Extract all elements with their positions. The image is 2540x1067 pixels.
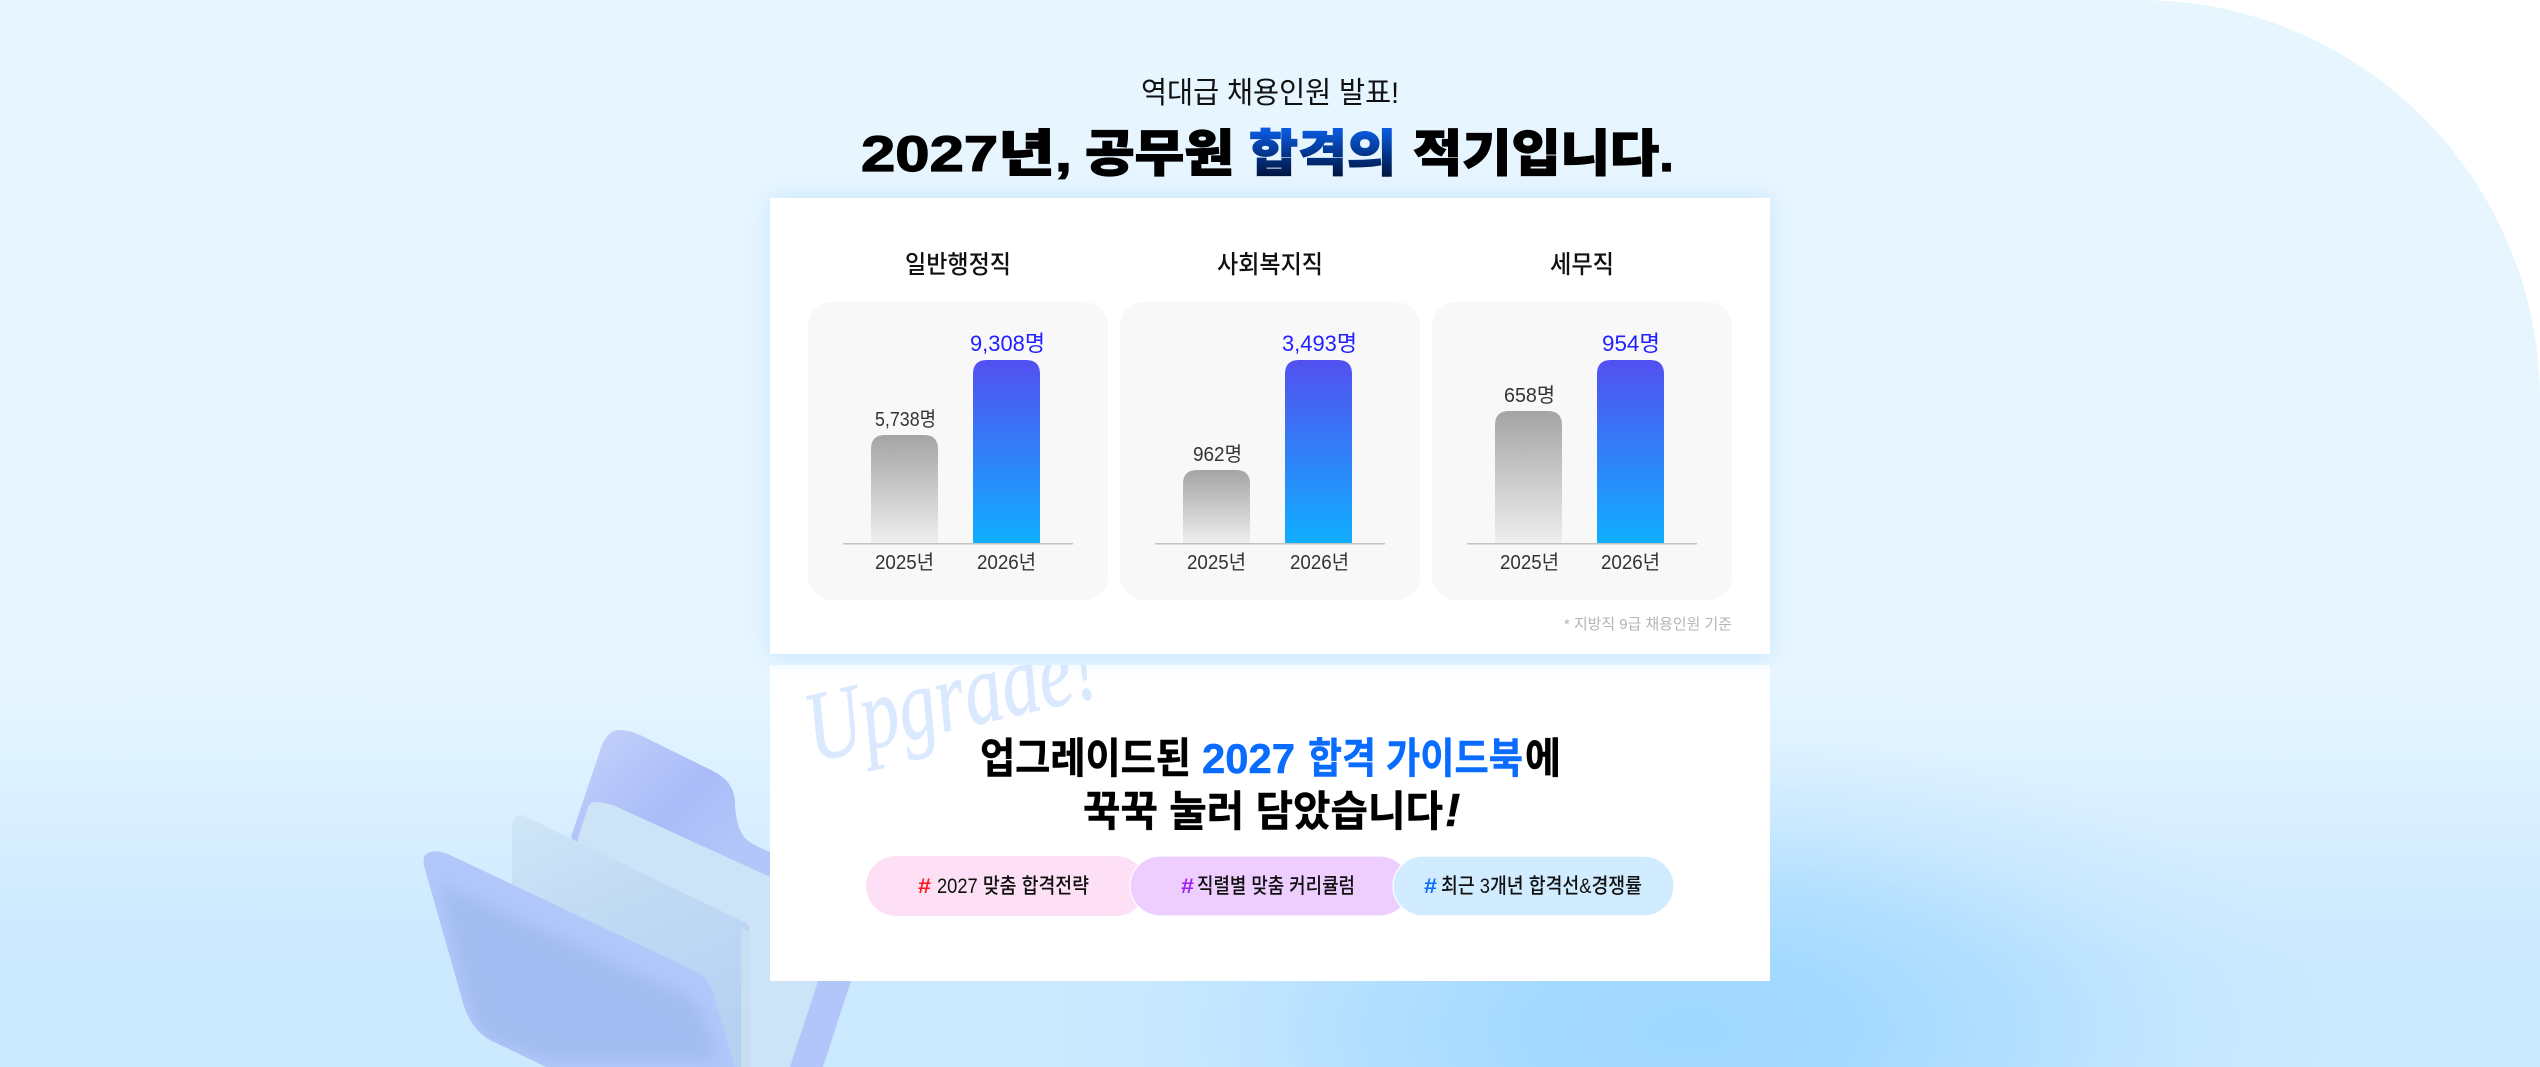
panel shadow xyxy=(770,198,1770,656)
axis labels: 2026년 xyxy=(1601,551,1660,574)
tag: 2027 맞춤 합격전략 xyxy=(866,856,1146,916)
subtitle: 역대급 채용인원 발표! xyxy=(1141,77,1399,110)
title: 2027년, xyxy=(861,126,1072,182)
column: 일반행정직 xyxy=(808,251,1108,600)
title xyxy=(861,126,1674,182)
icon: folder illustration xyxy=(424,730,880,1067)
card xyxy=(1432,302,1732,600)
tag: 2027 맞춤 합격전략: 2027 맞춤 합격전략 xyxy=(937,875,1089,898)
axis labels: 2026년 xyxy=(1290,551,1349,574)
heading: 사회복지직 xyxy=(1217,251,1323,279)
tag: 최근 3개년 합격선&경쟁률: 최근 3개년 합격선&경쟁률 xyxy=(1441,875,1642,898)
value 2025: 962명 xyxy=(1193,443,1242,466)
axis labels: 2025년 xyxy=(1500,551,1559,574)
bar 2025 xyxy=(871,435,938,543)
axis labels: 2025년 xyxy=(1187,551,1246,574)
title: 합격의 xyxy=(1249,126,1396,182)
headline line 1: 2027 xyxy=(1202,735,1295,782)
card xyxy=(1120,302,1420,600)
tag: 2027 맞춤 합격전략: # xyxy=(918,875,931,898)
heading: 세무직 xyxy=(1550,251,1614,279)
value 2025: 658명 xyxy=(1504,384,1555,407)
headline line 1: 가이드북 xyxy=(1386,735,1523,782)
panel: recruitment charts xyxy=(770,198,1770,654)
headline line 2: ! xyxy=(1445,784,1460,836)
headline line 1: 합격 xyxy=(1308,735,1376,782)
headline line 1 xyxy=(980,735,1561,782)
tag: 직렬별 맞춤 커리큘럼: 직렬별 맞춤 커리큘럼 xyxy=(1197,875,1355,898)
footnote: * 지방직 9급 채용인원 기준 xyxy=(1564,616,1732,633)
title: 공무원 xyxy=(1085,126,1234,182)
decorative handwritten word: Upgrade!: Upgrade! xyxy=(794,609,1107,783)
bar 2025 xyxy=(1183,470,1250,543)
bar 2026 xyxy=(1597,360,1664,543)
headline line 1: 에 xyxy=(1525,735,1561,782)
bar 2026 xyxy=(973,360,1040,543)
bar 2025 xyxy=(1495,411,1562,543)
value 2025: 5,738명 xyxy=(875,408,936,431)
tag: 최근 3개년 합격선&경쟁률 xyxy=(1393,856,1674,916)
heading: 일반행정직 xyxy=(905,251,1011,279)
axis labels xyxy=(1187,551,1349,574)
title: 적기입니다. xyxy=(1413,126,1674,182)
axis labels xyxy=(1500,551,1660,574)
axis labels xyxy=(875,551,1036,574)
headline line 1: 업그레이드된 xyxy=(980,735,1191,782)
axis labels: 2025년 xyxy=(875,551,934,574)
axis labels: 2026년 xyxy=(977,551,1036,574)
tag: 직렬별 맞춤 커리큘럼 xyxy=(1130,856,1410,916)
column: 사회복지직 xyxy=(1120,251,1420,600)
card xyxy=(808,302,1108,600)
tag: 직렬별 맞춤 커리큘럼: # xyxy=(1181,875,1194,898)
column: 세무직 xyxy=(1432,251,1732,600)
tag: 최근 3개년 합격선&경쟁률: # xyxy=(1424,875,1437,898)
headline line 2: 꾹꾹 눌러 담았습니다 xyxy=(1083,788,1443,835)
value 2026: 3,493명 xyxy=(1282,331,1357,356)
value 2026: 954명 xyxy=(1602,331,1660,356)
value 2026: 9,308명 xyxy=(970,331,1045,356)
bar 2026 xyxy=(1285,360,1352,543)
panel: upgrade guidebook xyxy=(770,665,1770,981)
